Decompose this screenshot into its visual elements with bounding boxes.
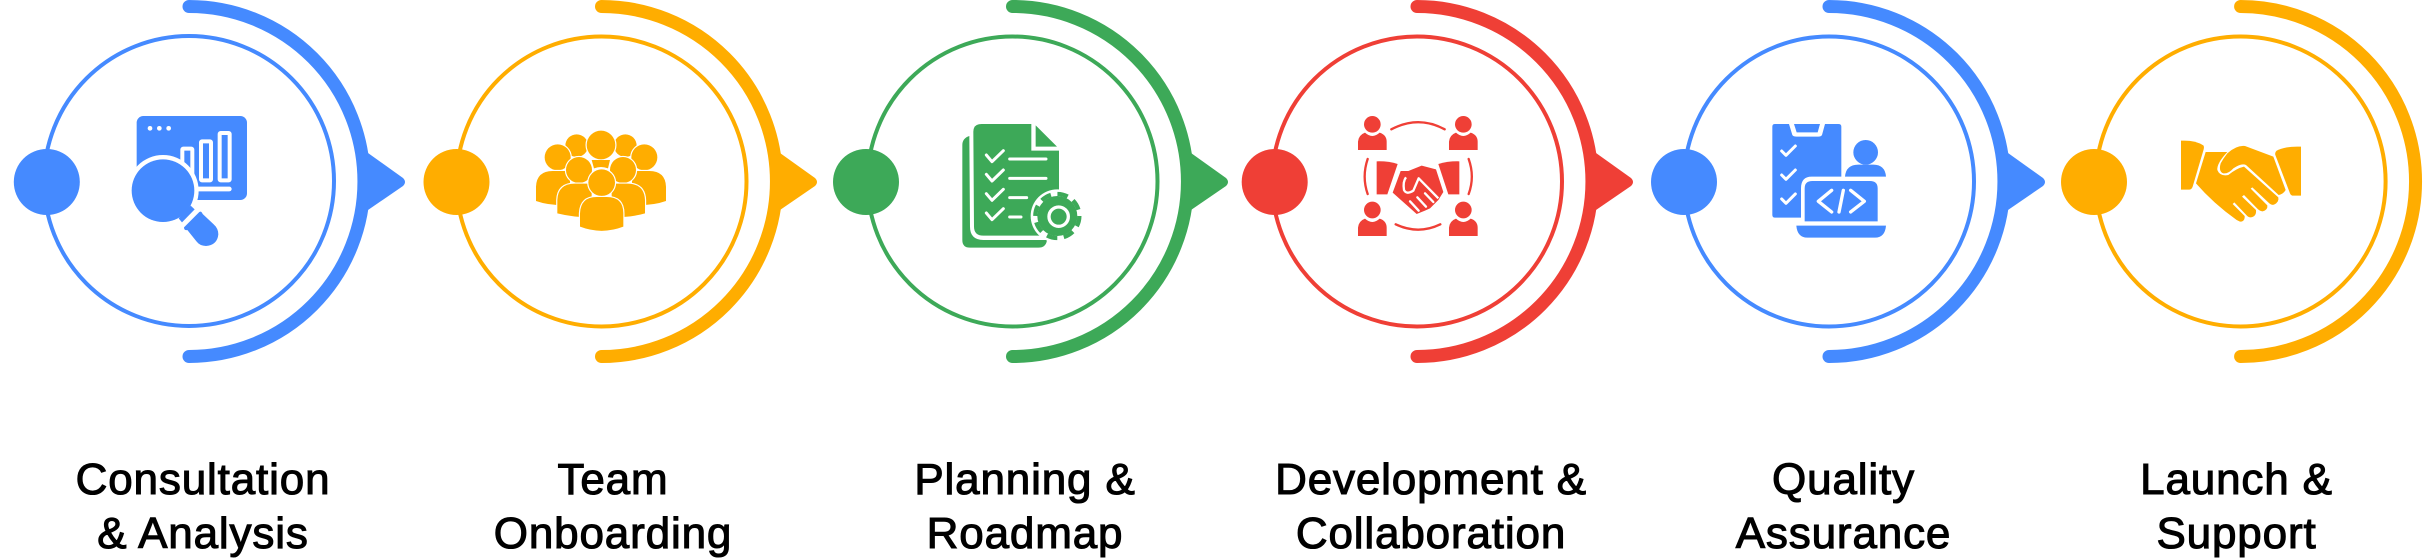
label: Planning & Roadmap: Planning &: [914, 455, 1136, 504]
inner ring: [868, 36, 1158, 326]
arrow: [2000, 150, 2045, 213]
label: Development & Collaboration: [1275, 455, 1587, 558]
label: Quality Assurance: Quality: [1772, 455, 1915, 504]
icon: collaboration handshake: [1358, 116, 1478, 236]
outer arc: [1012, 6, 1187, 356]
step 5: Quality Assurance: [1651, 6, 2045, 356]
node dot: [1242, 149, 1308, 215]
outer arc: [602, 6, 776, 356]
label: Quality Assurance: [1736, 455, 1951, 558]
label: Quality Assurance: Assurance: [1736, 509, 1951, 558]
node dot: [14, 149, 80, 215]
label: Consultation & Analysis: Consultation: [76, 455, 330, 504]
label: Launch & Support: Support: [2156, 509, 2317, 558]
node dot: [833, 149, 899, 215]
label: Consultation & Analysis: & Analysis: [97, 509, 309, 558]
node dot: [2061, 149, 2127, 215]
arrow: [1183, 150, 1228, 213]
inner ring: [44, 36, 334, 326]
label: Launch & Support: [2140, 455, 2333, 558]
arrow: [1588, 150, 1633, 213]
label: Development & Collaboration: Development &: [1275, 455, 1587, 504]
label: Planning & Roadmap: [914, 455, 1136, 558]
label: Planning & Roadmap: Roadmap: [927, 509, 1123, 558]
step 1: Consultation & Analysis: [14, 6, 405, 356]
outer arc: [189, 6, 364, 356]
label: Team Onboarding: Onboarding: [494, 509, 732, 558]
step 3: Planning & Roadmap: [833, 6, 1228, 356]
arrow: [360, 150, 405, 213]
step 2: Team Onboarding: [424, 6, 817, 356]
label: Team Onboarding: [494, 455, 732, 558]
icon: dashboard with magnifier: [127, 116, 247, 246]
step 4: Development & Collaboration: [1242, 6, 1633, 356]
label: Consultation & Analysis: [76, 455, 330, 558]
inner ring: [1272, 36, 1562, 326]
node dot: [1651, 149, 1717, 215]
outer arc: [1829, 6, 2004, 356]
label: Team Onboarding: Team: [558, 455, 668, 504]
outer arc: [1417, 6, 1592, 356]
node dot: [424, 149, 490, 215]
icon: team of people: [536, 131, 666, 231]
outer arc: [2241, 6, 2416, 356]
label: Development & Collaboration: Collaboration: [1296, 509, 1566, 558]
arrow: [772, 150, 817, 213]
icon: checklist document with gear: [962, 124, 1084, 248]
icon: handshake: [2181, 141, 2301, 222]
inner ring: [2096, 36, 2386, 326]
inner ring: [1684, 36, 1974, 326]
icon: clipboard, person and code laptop: [1772, 124, 1886, 238]
inner ring: [456, 36, 746, 326]
label: Launch & Support: Launch &: [2140, 455, 2333, 504]
step 6: Launch & Support: [2061, 6, 2416, 356]
